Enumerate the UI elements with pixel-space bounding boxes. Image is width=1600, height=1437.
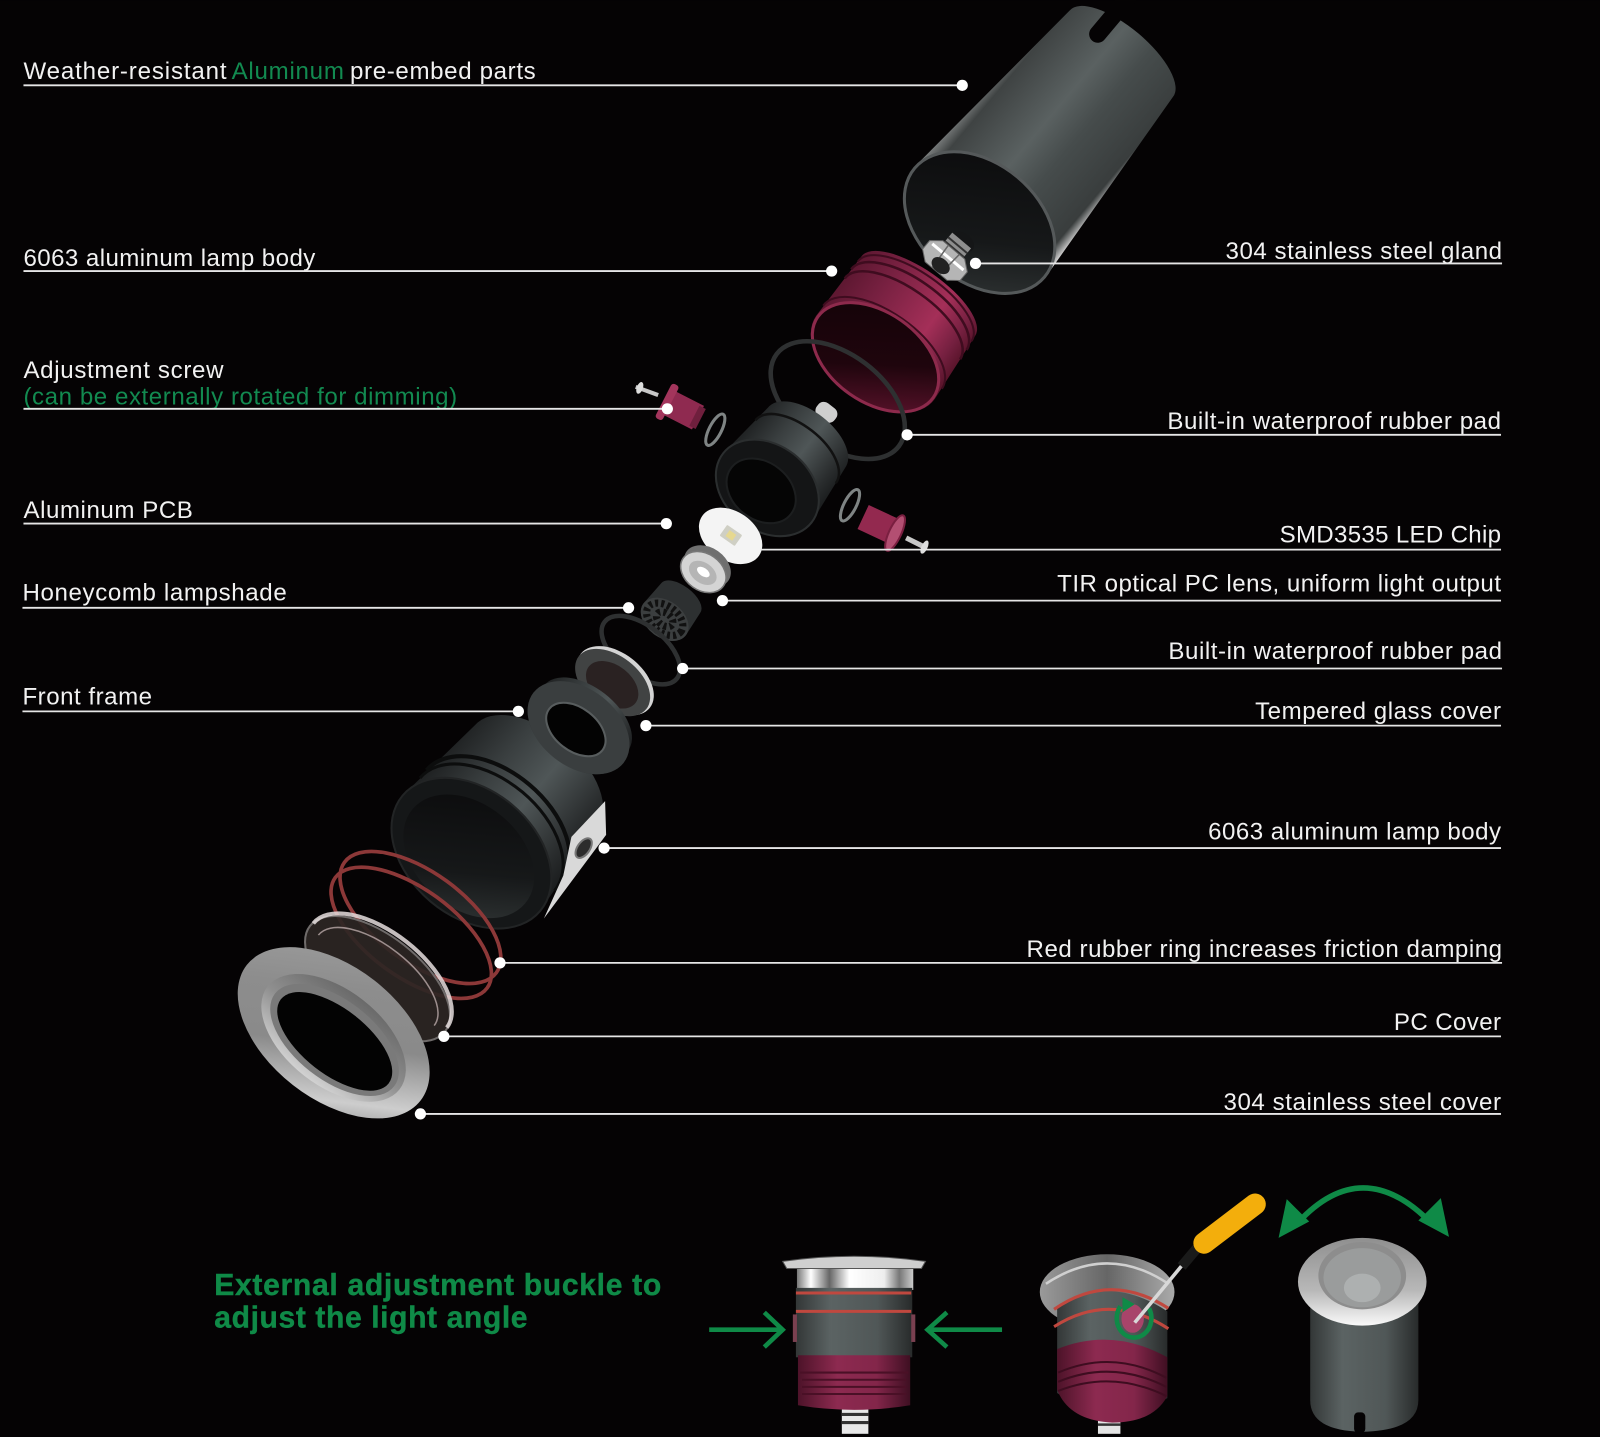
part: red aluminum lamp body xyxy=(790,233,993,436)
arrow: pressing from right xyxy=(928,1312,1002,1347)
callout: Tempered glass cover xyxy=(640,698,1501,731)
callout: PC Cover xyxy=(438,1009,1501,1042)
part: stainless steel cover xyxy=(206,913,461,1153)
callout: 6063 aluminum lamp body right xyxy=(598,818,1501,854)
callout: 304 stainless steel gland: 304 stainless steel gland xyxy=(1226,238,1502,265)
part: black rubber pad upper xyxy=(749,317,927,483)
heading: external adjustment: External adjustment buckle to xyxy=(214,1269,661,1302)
callout: Red rubber ring: Red rubber ring increases friction damping xyxy=(1027,936,1502,963)
icon: angled lamp with adjustment screw xyxy=(1040,1204,1255,1434)
callout: Front frame xyxy=(22,684,524,717)
callout: 304 stainless steel gland xyxy=(970,238,1502,269)
icon: installed lamp xyxy=(1298,1238,1427,1433)
callout: Weather-resistant Aluminum pre-embed parts: Weather-resistant xyxy=(23,58,227,85)
part: honeycomb lampshade xyxy=(632,572,709,650)
arrow: pressing from left xyxy=(709,1312,783,1347)
callout: Built-in waterproof rubber pad upper: Built-in waterproof rubber pad xyxy=(1167,408,1501,435)
part: aluminum PCB with LED chip xyxy=(688,496,773,576)
icon: side view lamp xyxy=(783,1256,926,1434)
callout: Adjustment screw: Adjustment screw xyxy=(23,357,224,384)
callout: Red rubber ring xyxy=(494,936,1502,968)
callout: TIR optical PC lens: TIR optical PC lens, uniform light output xyxy=(1057,570,1501,597)
callout: Front frame: Front frame xyxy=(22,684,152,711)
callout: Adjustment screw xyxy=(23,357,673,414)
part: stainless steel gland xyxy=(917,219,986,287)
part: main aluminum lamp body xyxy=(362,684,633,959)
arrow: double-headed rotation arc xyxy=(1279,1188,1449,1238)
callout: Weather-resistant Aluminum pre-embed parts: Aluminum xyxy=(232,58,344,85)
callout: 304 stainless steel cover xyxy=(415,1089,1501,1120)
callout: Aluminum PCB: Aluminum PCB xyxy=(23,497,193,524)
heading: external adjustment xyxy=(214,1269,661,1335)
part: red rubber rings xyxy=(309,826,523,1023)
callout: 6063 aluminum lamp body left: 6063 aluminum lamp body xyxy=(23,245,315,272)
callout: Weather-resistant Aluminum pre-embed parts xyxy=(23,58,968,91)
callout: Built-in waterproof rubber pad lower: Built-in waterproof rubber pad xyxy=(1168,638,1502,665)
callout: Built-in waterproof rubber pad lower xyxy=(677,638,1502,674)
callout: 304 stainless steel cover: 304 stainless steel cover xyxy=(1223,1089,1501,1116)
part: adjustment screw left xyxy=(635,381,729,448)
callout: Weather-resistant Aluminum pre-embed parts: pre-embed parts xyxy=(350,58,536,85)
callout: Adjustment screw: (can be externally rotated for dimming) xyxy=(23,384,457,411)
callout: TIR optical PC lens xyxy=(717,570,1501,606)
part: black rubber pad lower xyxy=(590,603,692,698)
callout: SMD3535 LED Chip: SMD3535 LED Chip xyxy=(1280,521,1501,548)
callout: Honeycomb lampshade: Honeycomb lampshade xyxy=(22,580,287,607)
callout: Aluminum PCB xyxy=(23,497,672,529)
callout: Tempered glass cover: Tempered glass cover xyxy=(1255,698,1501,725)
part: inner module body xyxy=(697,371,876,556)
part: PC cover xyxy=(284,889,474,1065)
part: adjustment screw right xyxy=(837,487,930,555)
callout: Built-in waterproof rubber pad upper xyxy=(902,408,1501,440)
callout: PC Cover: PC Cover xyxy=(1394,1009,1501,1036)
callout: 6063 aluminum lamp body left xyxy=(23,245,837,277)
part: front frame xyxy=(510,659,650,793)
part: tempered glass cover xyxy=(563,632,667,731)
heading: external adjustment: adjust the light angle xyxy=(214,1302,528,1335)
part: aluminum pre-embed cylinder xyxy=(876,0,1217,323)
part: TIR optical lens xyxy=(672,536,739,602)
callout: Honeycomb lampshade xyxy=(22,580,634,613)
callout: 6063 aluminum lamp body right: 6063 aluminum lamp body xyxy=(1208,818,1501,845)
